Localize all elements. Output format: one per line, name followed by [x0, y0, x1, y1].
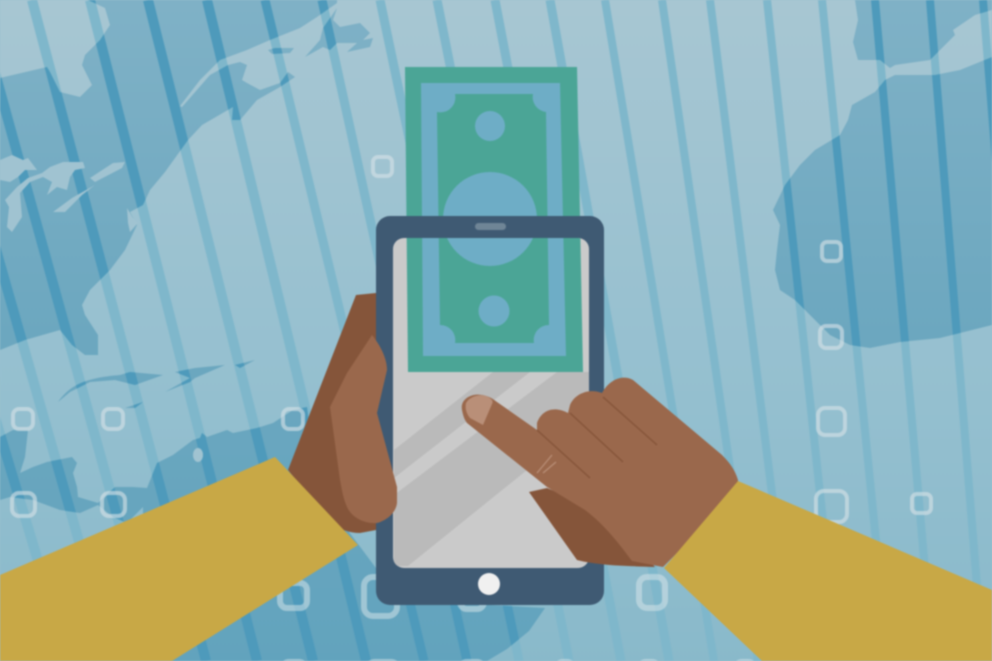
great lakes: [0, 155, 203, 462]
knuckle lines: [537, 455, 556, 473]
lower app icon squares: [280, 577, 755, 661]
background app icon squares: [4, 157, 931, 600]
hand and fingers: [462, 378, 738, 567]
left sleeve: [0, 457, 358, 661]
phone speaker: [475, 223, 506, 230]
dollar bill behind phone: [405, 67, 583, 372]
palm shadow: [529, 488, 655, 567]
left thumb: [330, 335, 397, 523]
fingernail: [466, 395, 493, 425]
dollar bill over screen: [406, 237, 584, 373]
phone body: [376, 216, 604, 605]
home button: [478, 573, 500, 595]
finger creases: [537, 397, 657, 478]
right hand pointing: [462, 378, 738, 567]
screen glare bands: [394, 372, 589, 566]
smartphone: [376, 216, 604, 605]
left hand back: [288, 293, 376, 533]
right sleeve: [664, 481, 992, 661]
phone screen: [393, 238, 589, 568]
